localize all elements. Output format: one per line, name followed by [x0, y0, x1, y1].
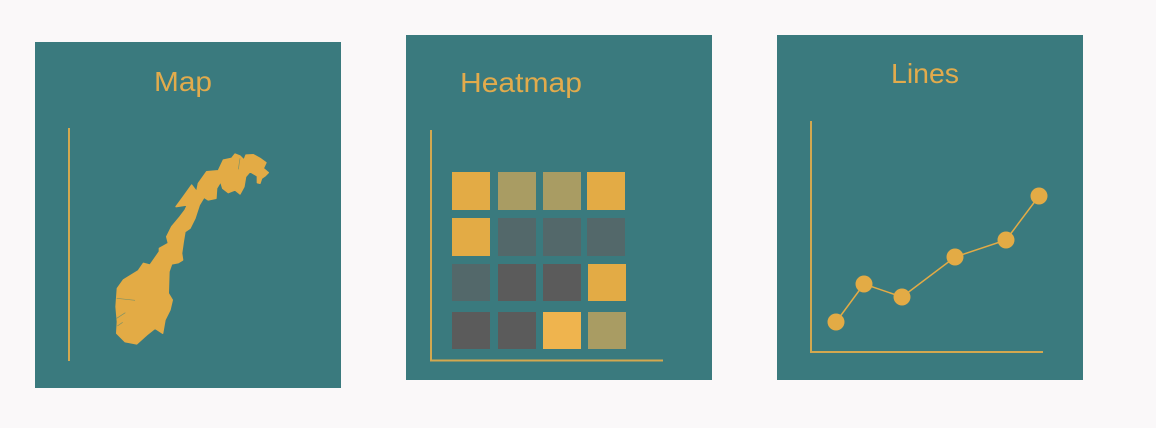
- panel: map: [35, 42, 341, 388]
- heatmap grid: [452, 172, 626, 349]
- map axis: [68, 128, 70, 361]
- heatmap axes: [431, 130, 663, 360]
- lines axes: [811, 121, 1043, 352]
- line chart: [828, 188, 1048, 330]
- panel: lines: [777, 35, 1083, 380]
- heading: heatmap: Heatmap: [460, 67, 582, 98]
- icon: map of Norway: [116, 154, 268, 344]
- heading: lines: Lines: [891, 58, 959, 89]
- panel: heatmap: [406, 35, 712, 380]
- heading: map: Map: [154, 66, 212, 97]
